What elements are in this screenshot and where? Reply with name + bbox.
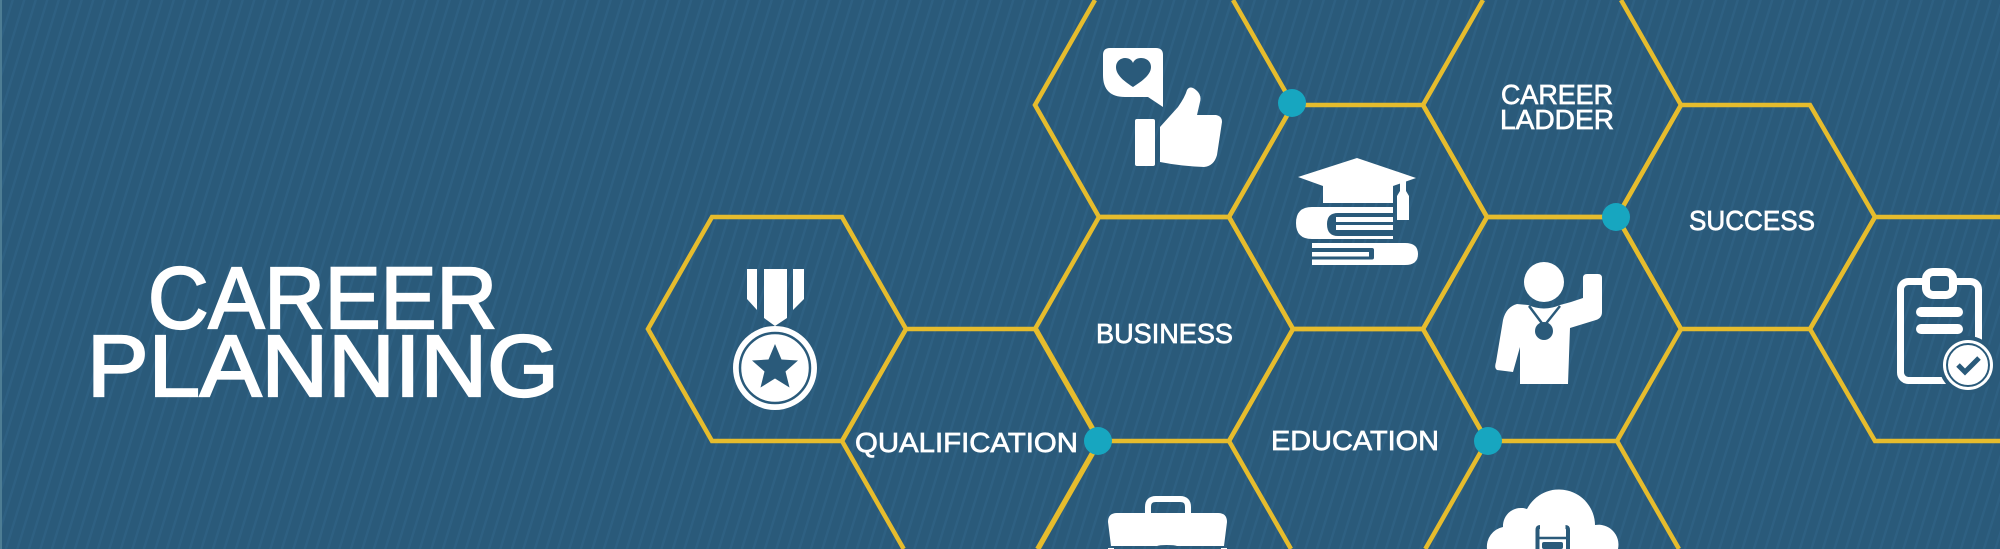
connector dot: qualification — [1084, 427, 1112, 455]
icon: graduation cap on books — [1296, 158, 1418, 265]
title — [87, 250, 559, 415]
connector dot: thumbs — [1278, 89, 1306, 117]
label: career ladder — [1500, 79, 1614, 135]
hexagon network — [648, 0, 2000, 549]
icon: medal — [733, 269, 817, 410]
icon: briefcase — [1108, 499, 1227, 549]
label: education: EDUCATION — [1271, 425, 1439, 456]
icon: cloud with ladder — [1487, 489, 1618, 549]
connector dot: education — [1474, 427, 1502, 455]
label: business: BUSINESS — [1096, 318, 1233, 349]
title: PLANNING — [87, 318, 559, 415]
title: CAREER — [148, 250, 497, 347]
icon: person with medal — [1495, 262, 1602, 384]
icon: heart bubble and thumbs up — [1103, 48, 1222, 167]
connector dot: success — [1602, 203, 1630, 231]
label: qualification: QUALIFICATION — [855, 427, 1078, 458]
label: success: SUCCESS — [1689, 205, 1815, 236]
label: career ladder: LADDER — [1500, 104, 1614, 135]
label: career ladder: CAREER — [1501, 79, 1613, 110]
icon: clipboard with check — [1900, 272, 1997, 394]
